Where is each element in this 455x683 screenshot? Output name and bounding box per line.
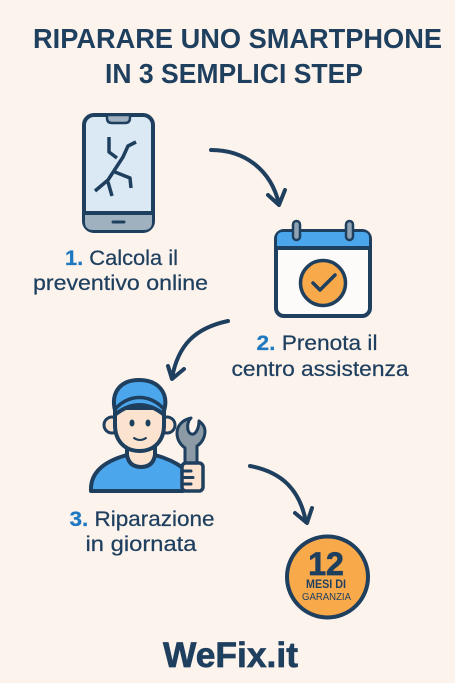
arrow: step 1 to step 2 — [211, 150, 285, 205]
step 2 label: 2. Prenota il — [256, 332, 378, 355]
step 1 label: 1. Calcola il — [65, 247, 178, 270]
arrow: step 3 to guarantee badge — [250, 466, 312, 523]
badge: 12 months warranty — [287, 536, 368, 618]
step 3 label — [70, 508, 214, 556]
step 2 label — [232, 332, 409, 381]
icon: cracked phone — [84, 115, 153, 231]
step 3 label: in giornata — [86, 533, 197, 556]
icon: technician with wrench — [91, 380, 205, 491]
icon: calendar — [276, 221, 370, 316]
title: RIPARARE UNO SMARTPHONE — [33, 23, 442, 54]
title: IN 3 SEMPLICI STEP — [105, 58, 363, 89]
title — [33, 23, 442, 89]
arrow: step 2 to step 3 — [168, 321, 228, 379]
badge: 12 months warranty: MESI DI — [306, 579, 346, 591]
step 1 label: preventivo online — [33, 272, 208, 295]
step 3 label: 3. Riparazione — [70, 508, 214, 531]
step 1 label — [33, 247, 208, 295]
brand logo: WeFix.it — [163, 636, 298, 675]
badge: 12 months warranty: 12 — [308, 546, 344, 582]
badge: 12 months warranty: GARANZIA — [302, 591, 351, 603]
step 2 label: centro assistenza — [232, 358, 409, 381]
